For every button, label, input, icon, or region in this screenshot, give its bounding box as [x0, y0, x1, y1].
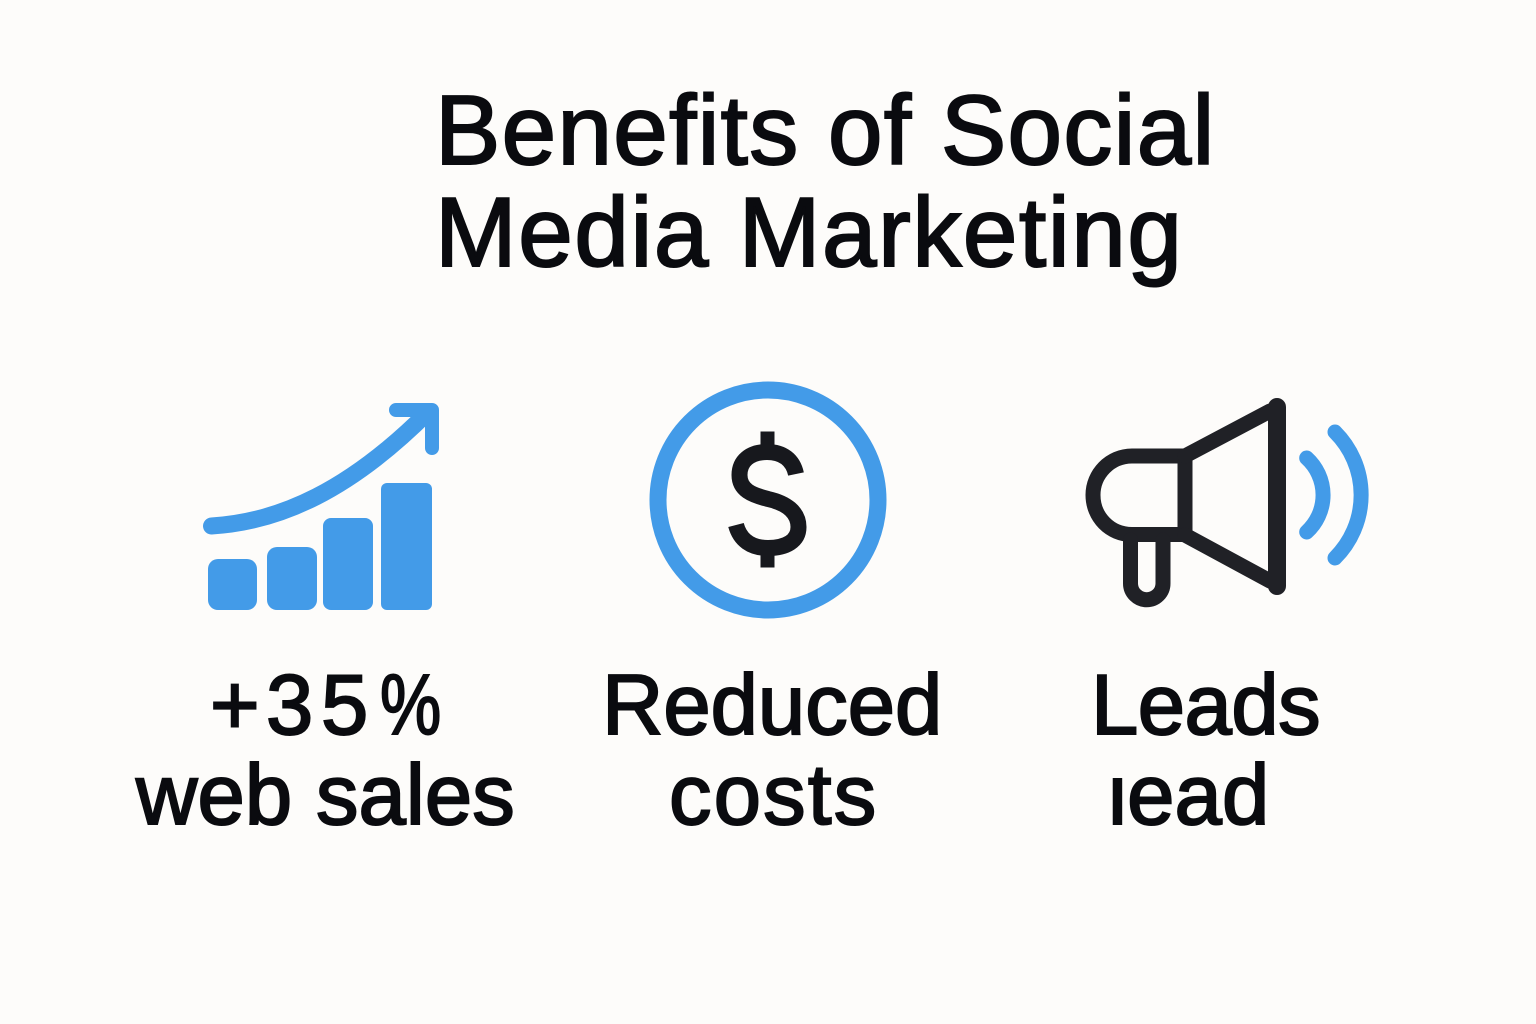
stat label: leads: lead: [1108, 748, 1270, 843]
stat label: web sales: +35: [210, 658, 380, 753]
stat label: web sales: web sales: [136, 748, 515, 843]
icon: megaphone: [1086, 398, 1369, 608]
stat label: web sales: %: [380, 658, 441, 753]
stat label: leads: Leads: [1091, 658, 1320, 753]
title: [435, 75, 1216, 288]
icon: dollar coin: [650, 382, 886, 618]
stat label: web sales: [134, 658, 515, 843]
icon: growth bar chart with arrow: [203, 403, 439, 610]
stat label: reduced costs: costs: [669, 748, 878, 843]
stat label: leads: [1091, 658, 1320, 843]
title: Media Marketing: [435, 177, 1183, 287]
stat label: reduced costs: [602, 658, 942, 843]
title: Benefits of Social: [435, 75, 1216, 185]
stat label: reduced costs: Reduced: [602, 658, 942, 753]
